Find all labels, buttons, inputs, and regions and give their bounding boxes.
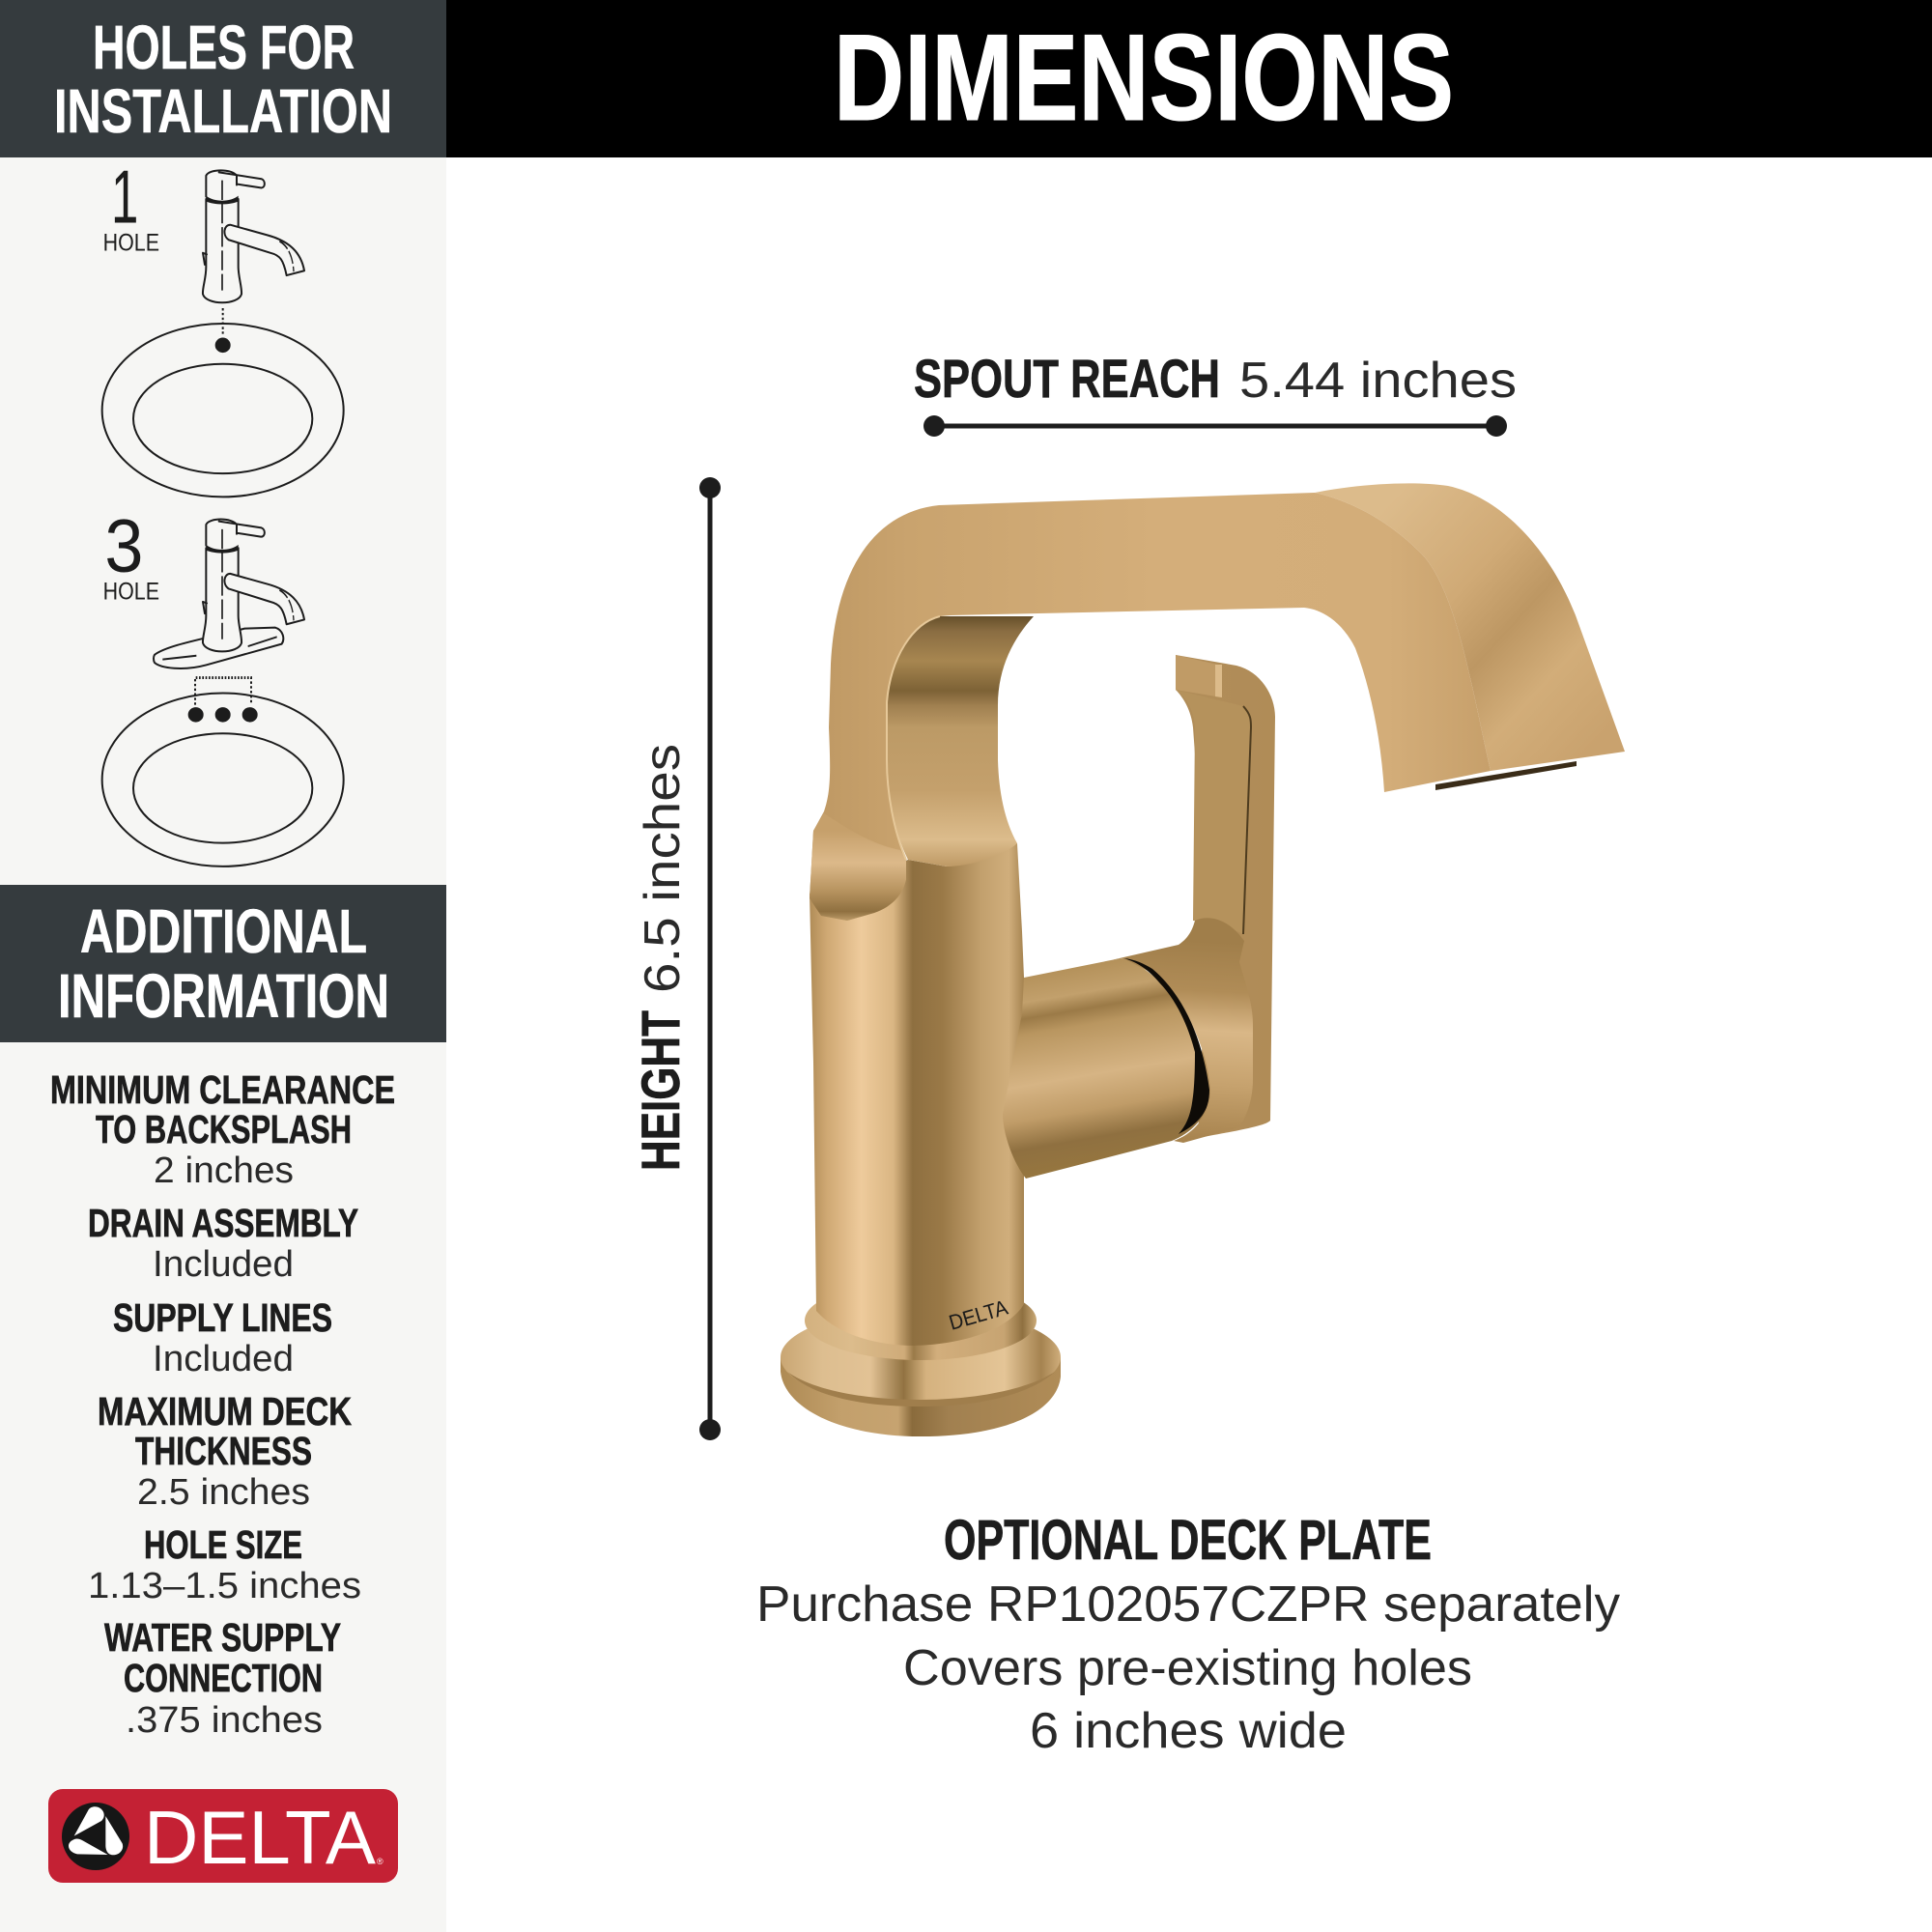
spout inner arch [887,616,1034,867]
diagram: 3 hole faucet with deck plate and basin [102,505,344,867]
heading: additional information: ADDITIONAL [80,896,367,966]
text block: additional information list: 2 inches [154,1151,294,1191]
dimension: spout reach [914,348,1517,437]
text block: additional information list: SUPPLY LINES [113,1295,332,1340]
faucet logo text: DELTA [946,1295,1010,1335]
product: gold faucet [781,483,1625,1436]
handle arm [1003,958,1209,1179]
spout side face [1315,483,1625,771]
text block: additional information list: THICKNESS [135,1429,312,1473]
text block: additional information list: HOLE SIZE [144,1522,302,1567]
text block: additional information list: 1.13–1.5 inches [88,1566,361,1606]
heading: holes for installation: HOLES FOR [93,13,355,82]
faucet body [810,843,1024,1346]
heading: additional information: INFORMATION [58,961,389,1031]
dimension: height [630,477,721,1440]
handle hub [1111,918,1253,1143]
logo: delta: DELTA [144,1795,376,1880]
diagram: 1 hole faucet and basin: HOLE [103,228,159,256]
text block: optional deck plate: 6 inches wide [1030,1703,1347,1759]
diagram: 3 hole faucet with deck plate and basin: HOLE [103,577,159,605]
lever tab [1176,655,1222,697]
text block: additional information list: WATER SUPPLY [104,1615,341,1660]
text block: additional information list: TO BACKSPLASH [96,1107,352,1151]
spout neck shade [810,813,906,921]
text block: additional information list: .375 inches [126,1700,323,1741]
dimension: height: HEIGHT [630,1010,691,1171]
dimension: spout reach: SPOUT REACH [914,348,1220,409]
lever back plate [1176,655,1275,1138]
heading: additional information [0,885,446,1042]
text block: additional information list: MAXIMUM DECK [98,1389,352,1434]
text block: additional information list: Included [153,1339,294,1379]
dimension: height: 6.5 inches [635,744,691,993]
spout front band [810,493,1491,921]
lever seam line [1243,706,1251,934]
diagram: 1 hole faucet and basin [102,156,344,497]
heading: holes for installation: INSTALLATION [54,76,392,146]
text block: optional deck plate: OPTIONAL DECK PLATE [944,1509,1432,1572]
logo: delta [48,1789,398,1883]
text block: optional deck plate [756,1509,1620,1759]
text block: additional information list: MINIMUM CLEARANCE [50,1067,395,1112]
text block: optional deck plate: Purchase RP102057CZPR separately [756,1577,1620,1633]
text block: additional information list [50,1067,395,1741]
title: DIMENSIONS [834,9,1454,146]
text block: additional information list: DRAIN ASSEMBLY [88,1201,358,1245]
aerator [1435,761,1577,790]
diagram: 3 hole faucet with deck plate and basin: 3 [104,505,143,588]
logo: delta: ® [377,1857,384,1866]
text block: optional deck plate: Covers pre-existing holes [903,1640,1472,1696]
faucet base plate [781,1281,1061,1436]
lever front panel [1176,690,1251,934]
black gap ring [1123,958,1209,1134]
text block: additional information list: Included [153,1244,294,1285]
dimension: spout reach: 5.44 inches [1239,353,1517,409]
top banner: dimensions [446,0,1932,157]
text block: additional information list: 2.5 inches [137,1472,310,1513]
heading: holes for installation [0,0,446,157]
lever tab stripe [1215,665,1222,697]
spout inner rim highlight [887,616,940,860]
diagram: 1 hole faucet and basin: 1 [111,156,138,240]
text block: additional information list: CONNECTION [124,1656,323,1700]
